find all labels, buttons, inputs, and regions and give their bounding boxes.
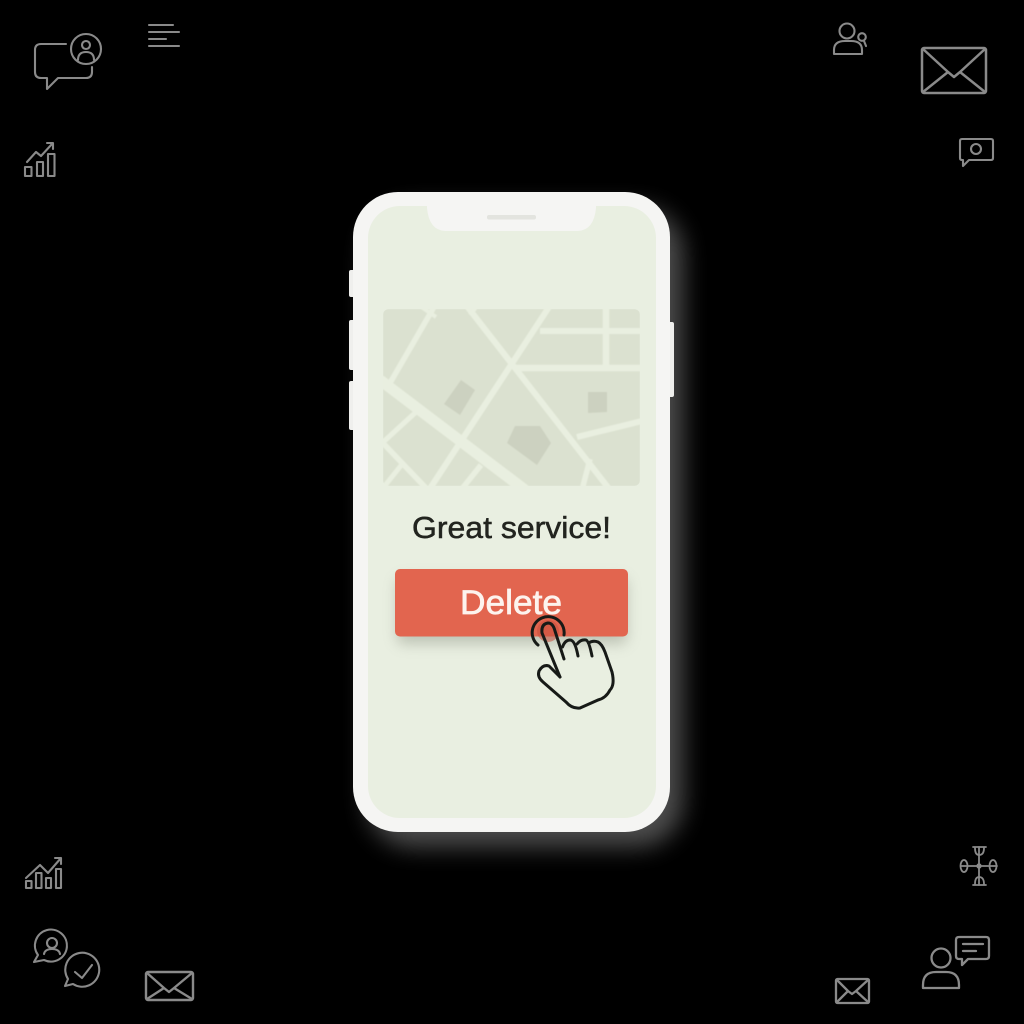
icon: chat bubble with user: [35, 34, 101, 89]
icon: envelope bottom right: [836, 979, 869, 1003]
icon: user with speech bubble: [923, 937, 989, 988]
icon: user chat and check chat: [34, 930, 99, 987]
speaker: [487, 215, 536, 220]
map building 3: [507, 426, 551, 465]
map building 2: [588, 392, 607, 413]
icon: network nodes: [960, 847, 997, 885]
map building 1: [444, 380, 475, 415]
button shadow: [397, 578, 627, 644]
phone: [349, 192, 683, 847]
icon: large envelope: [922, 48, 986, 93]
icon: user with magnifier: [834, 24, 866, 54]
phone body: [353, 192, 670, 832]
icon: growth chart top left: [25, 143, 54, 176]
notch: [427, 205, 596, 231]
icon: envelope bottom left: [146, 972, 193, 1000]
delete button: [395, 569, 628, 636]
delete button: Delete: [460, 584, 562, 622]
side buttons: [349, 270, 674, 430]
icon: text lines: [149, 25, 179, 46]
heading text: Great service!: [412, 510, 611, 545]
phone glow shadow: [367, 207, 683, 847]
icon: growth chart bottom left: [26, 858, 61, 888]
map: [380, 305, 642, 490]
icon: tapping hand: [532, 617, 613, 708]
phone screen: [368, 206, 656, 818]
icon: small chat with dot: [960, 139, 993, 166]
